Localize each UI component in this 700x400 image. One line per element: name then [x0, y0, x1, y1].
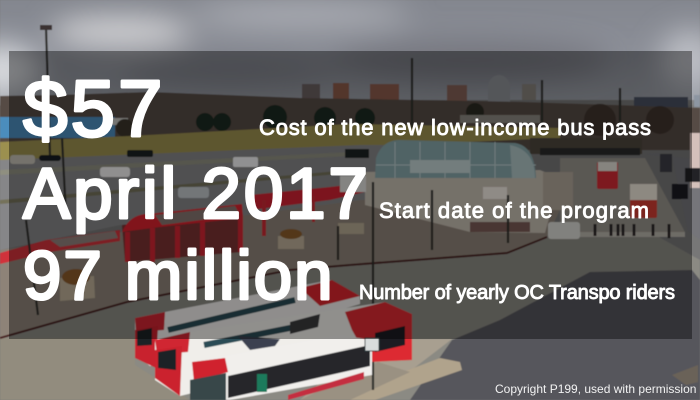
sign [365, 338, 379, 351]
right road [646, 154, 700, 240]
planters [278, 236, 304, 249]
label: cost of pass: Cost of the new low-income bus pass [259, 115, 651, 140]
label: start date: Start date of the program [379, 198, 649, 223]
curb [0, 237, 547, 338]
parked buses: middle [155, 302, 412, 396]
dark road [410, 270, 700, 400]
highway [0, 145, 400, 250]
treeline [0, 92, 700, 150]
plaza [0, 195, 560, 338]
station building [365, 170, 560, 233]
far low building [530, 138, 642, 154]
stat: April 2017: April 2017 [23, 155, 371, 234]
manhole plate [672, 365, 698, 385]
parked buses: rear [135, 280, 360, 366]
skyline [302, 84, 320, 102]
stat: $57: $57 [23, 64, 165, 153]
red buses far [597, 162, 618, 189]
photo credit: Copyright P199, used with permission [495, 382, 696, 396]
poles [26, 28, 620, 390]
parked vehicles [10, 155, 35, 164]
label: riders: Number of yearly OC Transpo riders [359, 282, 675, 304]
pedestrians and crosswalk [580, 232, 685, 237]
middle road [0, 232, 700, 400]
stat: 97 million: 97 million [23, 237, 334, 314]
lower pavement [0, 338, 190, 400]
grass [0, 124, 560, 165]
red shelters [122, 212, 242, 262]
translucent dark panel [9, 51, 692, 339]
parked buses: front [192, 335, 372, 400]
